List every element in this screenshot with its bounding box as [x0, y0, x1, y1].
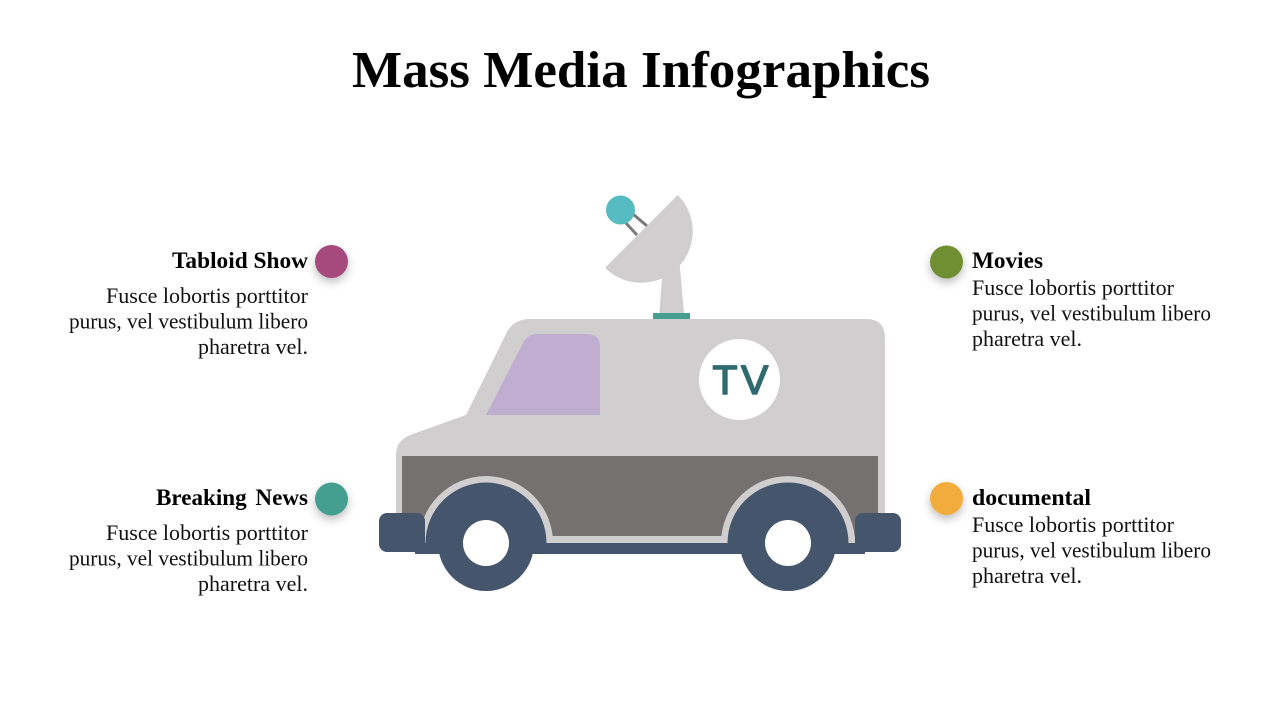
text block: Fusce lobortis porttitor	[106, 283, 309, 308]
marker dot	[930, 482, 963, 515]
text block: pharetra vel.	[198, 571, 308, 596]
text block: purus, vel vestibulum libero	[972, 300, 1211, 326]
icon: satellite dish	[605, 195, 693, 319]
text block: pharetra vel.	[972, 326, 1082, 351]
heading: Movies	[972, 248, 1043, 273]
text block	[972, 275, 1211, 351]
van body	[396, 319, 885, 543]
text block: pharetra vel.	[972, 563, 1082, 588]
text block: Fusce lobortis porttitor	[106, 520, 309, 545]
text block	[69, 283, 309, 359]
panel: Tabloid Show	[69, 245, 348, 359]
panel: Movies	[930, 246, 1211, 351]
marker dot	[315, 245, 348, 278]
chassis bar	[415, 543, 865, 554]
text block: purus, vel vestibulum libero	[69, 546, 308, 570]
panel: documental	[930, 482, 1211, 588]
heading: documental	[972, 485, 1091, 510]
heading: Breaking News	[156, 485, 308, 510]
panel: Breaking News	[69, 482, 348, 596]
text block: purus, vel vestibulum libero	[69, 308, 308, 334]
front wheel	[426, 483, 546, 591]
illustration: TV news van	[379, 195, 901, 591]
wheel arches	[419, 476, 855, 543]
text block	[69, 520, 309, 596]
heading: Tabloid Show	[172, 248, 308, 273]
marker dot	[930, 246, 963, 278]
text block: pharetra vel.	[198, 334, 308, 359]
marker dot	[315, 482, 348, 516]
icon: TV badge	[699, 339, 780, 420]
title: Mass Media Infographics	[352, 42, 930, 99]
van window	[486, 334, 600, 415]
text block: Fusce lobortis porttitor	[972, 275, 1175, 300]
front bumper	[379, 513, 425, 552]
text block	[972, 512, 1211, 588]
icon: TV badge: TV	[712, 357, 769, 403]
text block: purus, vel vestibulum libero	[972, 538, 1211, 562]
rear wheel	[728, 482, 848, 591]
van lower panel	[402, 456, 878, 536]
rear bumper	[855, 513, 901, 552]
text block: Fusce lobortis porttitor	[972, 512, 1175, 537]
